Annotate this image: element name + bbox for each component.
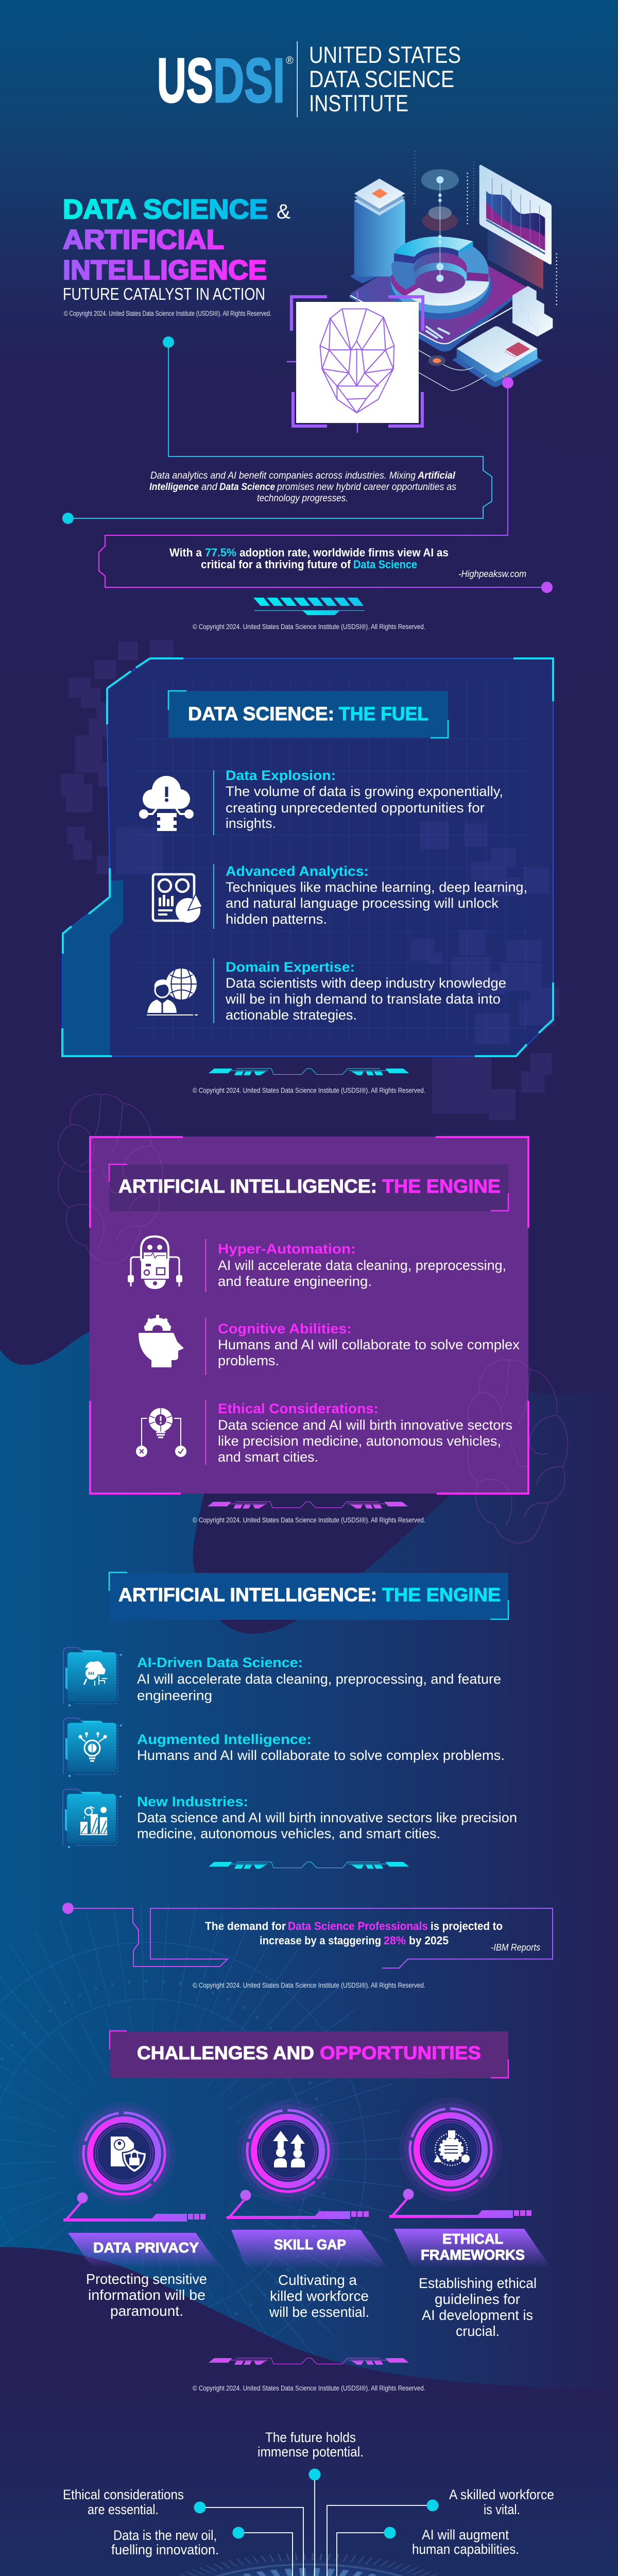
text: new industries <box>137 1794 517 1841</box>
logo: INSTITUTE <box>309 90 408 116</box>
statement: data is the new oil: fuelling innovation. <box>111 2542 219 2557</box>
background blue region <box>0 1331 618 2389</box>
text: skill gap: killed workforce <box>270 2288 369 2304</box>
text: ethical frameworks: guidelines for <box>435 2291 520 2307</box>
callout: 77.5% adoption rate: critical for a thriving future of <box>201 558 351 571</box>
text: ethical frameworks: Establishing ethical <box>419 2275 537 2291</box>
statement: immense potential: The future holds <box>265 2430 356 2445</box>
panel: data science the fuel <box>62 658 560 1056</box>
item: domain expertise: actionable strategies. <box>226 1007 357 1023</box>
item: data explosion <box>213 768 503 835</box>
label: skill gap: SKILL GAP <box>274 2236 346 2252</box>
panel: artificial intelligence the engine <box>90 1137 528 1494</box>
callout: intro text with cyan connector: Artificial <box>417 470 456 481</box>
statement: skilled workforce <box>449 2487 554 2517</box>
item: domain expertise: will be in high demand to translate data into <box>225 991 501 1007</box>
icon: ethical bulb brain <box>136 1408 186 1457</box>
callout: 77.5% adoption rate <box>99 377 553 593</box>
item: domain expertise: Domain Expertise: <box>226 959 355 975</box>
callout: 28% demand: -IBM Reports <box>491 1942 540 1953</box>
item: hyper-automation: Hyper-Automation: <box>218 1241 356 1257</box>
background purple blob <box>193 1484 464 1634</box>
card: skill gap <box>227 2099 388 2320</box>
heading: ai the engine purple: ARTIFICIAL INTELLIGENCE: <box>118 1176 377 1197</box>
item: cognitive abilities: problems. <box>218 1353 279 1368</box>
icon: cloud alert chip <box>139 776 194 831</box>
main title <box>63 194 290 317</box>
icon: augmented intelligence tile <box>63 1718 122 1777</box>
icon: head with gear <box>139 1315 184 1367</box>
main title: FUTURE CATALYST IN ACTION <box>63 284 265 303</box>
statement: augment human capabilities: AI will augment <box>422 2527 509 2543</box>
callout: 28% demand: increase by a staggering <box>260 1934 381 1947</box>
callout: 28% demand: 28% <box>384 1934 406 1947</box>
text: ethical frameworks: crucial. <box>456 2323 500 2339</box>
item: ethical considerations: Ethical Considerations: <box>218 1401 379 1416</box>
item: cognitive abilities <box>205 1318 520 1375</box>
text: ai-driven data science: engineering <box>137 1688 212 1703</box>
text: augmented intelligence: Augmented Intelligence: <box>137 1732 312 1747</box>
logo: DSI <box>213 45 285 115</box>
callout: 28% demand <box>62 1903 553 1968</box>
text: new industries: medicine, autonomous vehicles, and smart cities. <box>137 1826 440 1841</box>
main title: & <box>277 200 290 223</box>
text: new industries: New Industries: <box>137 1794 248 1809</box>
heading: challenges and opportunities: CHALLENGES AND <box>137 2042 314 2063</box>
callout: intro text with cyan connector <box>62 336 492 524</box>
text: data privacy: paramount. <box>110 2303 183 2319</box>
card: ethical frameworks <box>389 2098 551 2339</box>
ring and pointer: data privacy <box>63 2102 205 2222</box>
statement: immense potential <box>258 2430 364 2460</box>
icon: expert with globe brain <box>147 969 198 1015</box>
ornament: cyan divider <box>209 1069 409 1075</box>
callout: intro text with cyan connector: and <box>201 482 218 493</box>
text: ai-driven data science: AI-Driven Data Science: <box>137 1655 303 1670</box>
item: hyper-automation: and feature engineering. <box>218 1274 372 1289</box>
text: data privacy: information will be <box>88 2287 205 2303</box>
statement: data is the new oil: Data is the new oil, <box>113 2528 217 2543</box>
item: ethical considerations: Data science and AI will birth innovative sectors <box>218 1417 512 1433</box>
label: ethical frameworks: FRAMEWORKS <box>421 2247 525 2263</box>
decorative floating squares <box>61 640 552 1120</box>
text: skill gap <box>269 2272 369 2320</box>
item: data explosion: The volume of data is growing exponentially, <box>226 784 503 799</box>
heading: ai the engine blue: ARTIFICIAL INTELLIGENCE: <box>118 1584 377 1605</box>
label: skill gap <box>231 2230 388 2268</box>
heading: challenges and opportunities <box>110 2031 508 2078</box>
heading: ai the engine purple: THE ENGINE <box>382 1176 501 1197</box>
isometric data illustration <box>349 151 557 391</box>
icon: new industries tile <box>63 1789 122 1848</box>
item: data explosion: Data Explosion: <box>226 768 336 783</box>
label: data privacy: DATA PRIVACY <box>93 2240 199 2256</box>
text: skill gap: Cultivating a <box>278 2272 357 2288</box>
ornament: cyan divider <box>209 1862 409 1869</box>
logo: UNITED STATES <box>309 42 461 68</box>
item: hyper-automation <box>205 1239 506 1292</box>
icon: ai-driven data science tile <box>63 1648 122 1706</box>
statement: ethical considerations: are essential. <box>88 2502 159 2517</box>
item: advanced analytics: Techniques like machine learning, deep learning, <box>226 879 527 895</box>
text: ethical frameworks <box>419 2275 537 2339</box>
item: ethical considerations: and smart cities. <box>218 1449 318 1465</box>
text: data privacy: Protecting sensitive <box>86 2271 207 2287</box>
text: augmented intelligence <box>137 1732 505 1763</box>
label: data privacy <box>68 2233 221 2268</box>
text: new industries: Data science and AI will birth innovative sectors like precision <box>137 1810 517 1825</box>
statement: ethical considerations <box>63 2487 184 2517</box>
statement: augment human capabilities <box>412 2527 519 2557</box>
callout: intro text with cyan connector: technology progresses. <box>257 493 348 504</box>
item: domain expertise <box>213 958 506 1023</box>
connectors to future statements <box>200 2475 433 2576</box>
item: advanced analytics: and natural language processing will unlock <box>226 895 499 911</box>
item: hyper-automation: AI will accelerate data cleaning, preprocessing, <box>218 1258 506 1273</box>
callout: intro text with cyan connector: Data Science <box>219 482 275 493</box>
ring and pointer: ethical frameworks <box>389 2098 531 2218</box>
logo <box>157 41 461 117</box>
background wave: upper purple <box>0 360 618 670</box>
callout: 28% demand: The demand for <box>205 1920 286 1933</box>
icon: analytics report <box>153 874 202 923</box>
callout: 28% demand: is projected to <box>431 1920 503 1933</box>
main title: DATA SCIENCE <box>63 194 268 225</box>
label: ethical frameworks: ETHICAL <box>442 2231 503 2247</box>
item: advanced analytics: Advanced Analytics: <box>226 863 369 879</box>
item: cognitive abilities: Cognitive Abilities: <box>218 1321 352 1336</box>
heading: data science the fuel: THE FUEL <box>339 703 428 724</box>
background data network pattern <box>0 1942 366 2375</box>
statement: data is the new oil <box>111 2528 219 2557</box>
heading: data science the fuel: DATA SCIENCE: <box>188 703 334 724</box>
copyright line: © Copyright 2024. United States Data Science Institute (USDSI®). All Rights Reserved. <box>193 623 425 631</box>
icon: document and shield <box>111 2137 146 2173</box>
heading: challenges and opportunities: OPPORTUNITIES <box>320 2042 481 2063</box>
item: ethical considerations: like precision medicine, autonomous vehicles, <box>218 1433 501 1449</box>
connector dots <box>194 2469 439 2539</box>
main title: ARTIFICIAL <box>63 225 224 255</box>
statement: ethical considerations: Ethical considerations <box>63 2487 184 2502</box>
item: data explosion: insights. <box>226 816 276 831</box>
logo: DATA SCIENCE <box>309 66 454 92</box>
text: data privacy <box>86 2271 207 2319</box>
icon: robot <box>128 1236 182 1289</box>
callout: 77.5% adoption rate: -Highpeaksw.com <box>458 569 526 579</box>
ring and pointer: skill gap <box>227 2099 369 2219</box>
item: advanced analytics <box>213 863 527 929</box>
icon: gear with shapes <box>434 2130 470 2165</box>
heading: ai the engine blue: THE ENGINE <box>382 1584 501 1605</box>
statement: immense potential: immense potential. <box>258 2444 364 2460</box>
callout: 77.5% adoption rate: With a <box>169 546 202 559</box>
text: skill gap: will be essential. <box>269 2304 369 2320</box>
callout: 28% demand: by 2025 <box>409 1934 449 1947</box>
ornament: magenta divider <box>209 2358 409 2365</box>
logo: US <box>157 45 213 115</box>
future burst graphic <box>131 2554 487 2576</box>
text: ai-driven data science <box>137 1655 501 1703</box>
copyright line: © Copyright 2024. United States Data Science Institute (USDSI®). All Rights Reserved. <box>193 2384 425 2392</box>
item: advanced analytics: hidden patterns. <box>226 911 327 927</box>
item: ethical considerations <box>205 1400 512 1465</box>
heading: data science the fuel <box>168 691 448 738</box>
text: ai-driven data science: AI will accelerate data cleaning, preprocessing, and feature <box>137 1671 501 1687</box>
callout: 77.5% adoption rate: 77.5% <box>205 546 236 559</box>
text: augmented intelligence: Humans and AI will collaborate to solve complex problems. <box>137 1748 505 1763</box>
label: ethical frameworks <box>394 2229 551 2267</box>
callout: 77.5% adoption rate: adoption rate, worldwide firms view AI as <box>239 546 449 559</box>
copyright line: © Copyright 2024. United States Data Science Institute (USDSI®). All Rights Reserved. <box>193 1087 425 1094</box>
card: data privacy <box>63 2102 221 2319</box>
logo: ® <box>286 55 294 66</box>
heading: ai the engine blue <box>109 1572 508 1620</box>
ornament: chevron divider <box>253 598 365 615</box>
statement: skilled workforce: is vital. <box>484 2502 520 2517</box>
main title: © Copyright 2024. United States Data Science Institute (USDSI®). All Rights Reserved. <box>64 310 271 317</box>
ornament: magenta divider <box>208 1502 408 1509</box>
statement: augment human capabilities: human capabilities. <box>412 2541 519 2557</box>
brain outlines <box>58 1094 568 1543</box>
callout: intro text with cyan connector: promises new hybrid career opportunities as <box>277 482 456 493</box>
statement: skilled workforce: A skilled workforce <box>449 2487 554 2502</box>
copyright line: © Copyright 2024. United States Data Science Institute (USDSI®). All Rights Reserved. <box>193 1516 425 1524</box>
callout: 77.5% adoption rate: Data Science <box>353 558 417 571</box>
face recognition card <box>287 292 423 433</box>
main title: INTELLIGENCE <box>63 255 267 285</box>
item: domain expertise: Data scientists with deep industry knowledge <box>226 975 506 991</box>
text: ethical frameworks: AI development is <box>422 2307 533 2323</box>
item: cognitive abilities: Humans and AI will collaborate to solve complex <box>218 1337 520 1352</box>
callout: intro text with cyan connector: Data analytics and AI benefit companies across industries. Mixing <box>150 470 416 481</box>
callout: intro text with cyan connector: Intelligence <box>149 482 199 493</box>
section: ai the engine blue <box>63 1572 517 1848</box>
item: data explosion: creating unprecedented opportunities for <box>226 800 485 816</box>
callout: 28% demand: Data Science Professionals <box>288 1920 428 1933</box>
icon: people with arrows <box>273 2131 305 2167</box>
heading: ai the engine purple <box>109 1164 508 1211</box>
copyright line: © Copyright 2024. United States Data Science Institute (USDSI®). All Rights Reserved. <box>193 1981 425 1989</box>
